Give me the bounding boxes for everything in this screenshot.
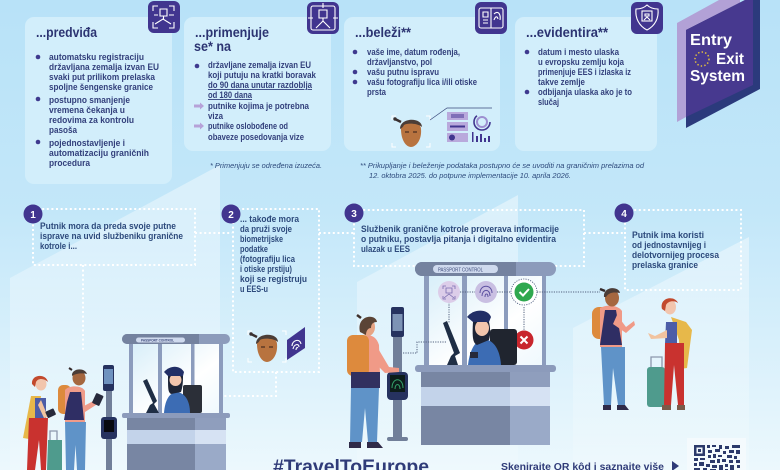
step 2: (fotografiju lica	[240, 254, 296, 264]
bullet list: beleži	[353, 47, 477, 97]
step 3	[344, 204, 625, 266]
bullet list: predviđa: automatsku registraciju	[49, 52, 144, 62]
step 1: isprave na uvid službeniku granične	[40, 231, 183, 241]
bullet list: primenjuje se na	[194, 60, 317, 142]
heading: primenjuje se na: se* na	[194, 38, 231, 54]
step 4	[614, 204, 741, 290]
logo: Entry Exit System	[677, 0, 760, 128]
step 2: koji se registruju	[240, 274, 307, 284]
bullet list: evidentira: odbijanja ulaska ako je to	[538, 87, 632, 97]
heading: primenjuje se na: ...primenjuje	[195, 24, 269, 40]
bullet list: primenjuje se na: državljane zemalja izvan EU	[208, 60, 311, 70]
bullet list: primenjuje se na: viza	[208, 111, 224, 121]
bullet list: primenjuje se na: putnike oslobođene od	[208, 121, 288, 131]
illustration: traveller and companion after border check	[592, 288, 692, 410]
step 4: 4	[621, 209, 627, 220]
icon: fingerprint bubble	[475, 281, 497, 303]
bullet list: beleži: državljanstvo, pol	[367, 57, 432, 67]
bullet list: predviđa: postupno smanjenje	[49, 95, 130, 105]
bullet list: evidentira: u evropsku zemlju koja	[538, 57, 625, 67]
illustration: male traveller with passport	[58, 368, 104, 470]
heading: predviđa: ...predviđa	[36, 24, 97, 40]
bullet list: predviđa: pasoša	[49, 125, 78, 135]
bullet list: predviđa: automatizaciju graničnih	[49, 148, 149, 158]
bullet list: predviđa: državljana zemalja izvan EU	[49, 62, 159, 72]
bullet list: primenjuje se na: putnike kojima je potrebna	[208, 101, 310, 111]
bullet list: predviđa: vremena čekanja u	[49, 105, 125, 115]
bullet list: evidentira: takve zemlje	[538, 77, 585, 87]
bullet list: predviđa: redovima za kontrolu	[49, 115, 134, 125]
step 2: da pruži svoje	[240, 224, 292, 234]
step 2: ... takođe mora	[240, 214, 300, 224]
illustration: biometric data charts	[430, 108, 492, 142]
illustration: face	[248, 331, 286, 362]
illustration: passport control booth, right	[403, 262, 600, 445]
icon: face scan	[148, 1, 180, 33]
icon: refused cross	[514, 330, 534, 350]
step 3: 3	[351, 209, 357, 220]
step 2: u EES-u	[240, 284, 268, 294]
illustration: passport control booth, right: PASSPORT CONTROL	[438, 268, 483, 274]
illustration: face with brackets	[392, 116, 430, 147]
step 4: od jednostavnijeg i	[632, 240, 706, 250]
illustration: biometric terminal, right	[387, 307, 408, 441]
bullet list: predviđa	[36, 52, 159, 168]
bullet list: beleži: vašu fotografiju lica i/ili otiske	[367, 77, 477, 87]
QR code	[687, 438, 746, 470]
bullet list: primenjuje se na: koji putuju na kratki boravak	[208, 70, 317, 80]
step 1: kotrole i...	[40, 241, 77, 251]
step 2: biometrijske	[240, 234, 283, 244]
icon: face scan bubble	[438, 281, 460, 303]
note: gradual implementation: 12. oktobra 2025. do potpune implementacije 10. aprila 2026.	[369, 171, 571, 180]
bullet list: beleži: prsta	[367, 87, 387, 97]
step 2: 2	[228, 210, 234, 221]
heading: evidentira: ...evidentira**	[526, 24, 609, 40]
icon: passport and fingerprint	[475, 2, 507, 34]
illustration: traveller at the scanner	[347, 315, 399, 448]
note: gradual implementation	[360, 161, 645, 180]
step 2: podatke	[240, 244, 268, 254]
bullet list: predviđa: spoljne šengenske granice	[49, 82, 153, 92]
step 3: ulazak u EES	[361, 244, 410, 254]
bullet list: predviđa: svaki put prilikom prelaska	[49, 72, 156, 82]
icon: shield	[631, 2, 663, 34]
panel: predviđa	[25, 17, 172, 184]
panel: beleži	[344, 17, 500, 151]
icon: portrait scan	[307, 2, 339, 34]
illustration: passport control booth, left: PASSPORT CONTROL	[141, 339, 174, 343]
bullet list: primenjuje se na: obaveze posedovanja vize	[208, 132, 304, 142]
step 1: 1	[30, 210, 36, 221]
icon: approved check	[511, 279, 537, 305]
bullet list: primenjuje se na: do 90 dana unutar razdoblja	[208, 80, 313, 90]
bullet list: evidentira	[525, 47, 632, 107]
logo: Entry Exit System: Exit	[716, 51, 744, 68]
bullet list: predviđa: procedura	[49, 158, 91, 168]
panel: primenjuje se na	[184, 17, 331, 151]
panel: evidentira	[515, 17, 657, 151]
note: exceptions: * Primenjuju se određena izuzeća.	[210, 161, 322, 170]
step 2	[222, 204, 355, 396]
bullet list: primenjuje se na: od 180 dana	[208, 90, 253, 100]
illustration: passport control booth, left	[122, 334, 230, 470]
bullet list: beleži: vašu putnu ispravu	[367, 67, 439, 77]
step 2: i otiske prstiju)	[240, 264, 292, 274]
step 1	[24, 204, 232, 352]
bullet list: predviđa: pojednostavljenje i	[49, 138, 125, 148]
heading: primenjuje se na	[194, 24, 269, 54]
logo: Entry Exit System: System	[690, 68, 745, 85]
step 3: o putniku, postavlja pitanja i digitalno evidentira	[361, 234, 557, 244]
icon: fingerprint flag	[287, 327, 305, 360]
step 4: prelaska granice	[632, 260, 698, 270]
step 1: Putnik mora da preda svoje putne	[40, 221, 176, 231]
step 3: Službenik granične kotrole proverava informacije	[361, 224, 559, 234]
logo: Entry Exit System: Entry	[690, 32, 732, 49]
step 4: delotvornijeg procesa	[632, 250, 720, 260]
bullet list: evidentira: datum i mesto ulaska	[538, 47, 620, 57]
heading: beleži: ...beleži**	[355, 24, 412, 40]
bullet list: evidentira: primenjuje EES i izlaska iz	[538, 67, 631, 77]
illustration: biometric terminal, left	[101, 365, 117, 470]
step 4: Putnik ima koristi	[632, 230, 704, 240]
bullet list: beleži: vaše ime, datum rođenja,	[367, 47, 460, 57]
bullet list: evidentira: slučaj	[538, 97, 559, 107]
illustration: female traveller with suitcase	[23, 376, 62, 470]
note: gradual implementation: ** Prikupljanje i beleženje podataka postupno će se uvoditi na graničnim prelazima od	[360, 161, 645, 170]
